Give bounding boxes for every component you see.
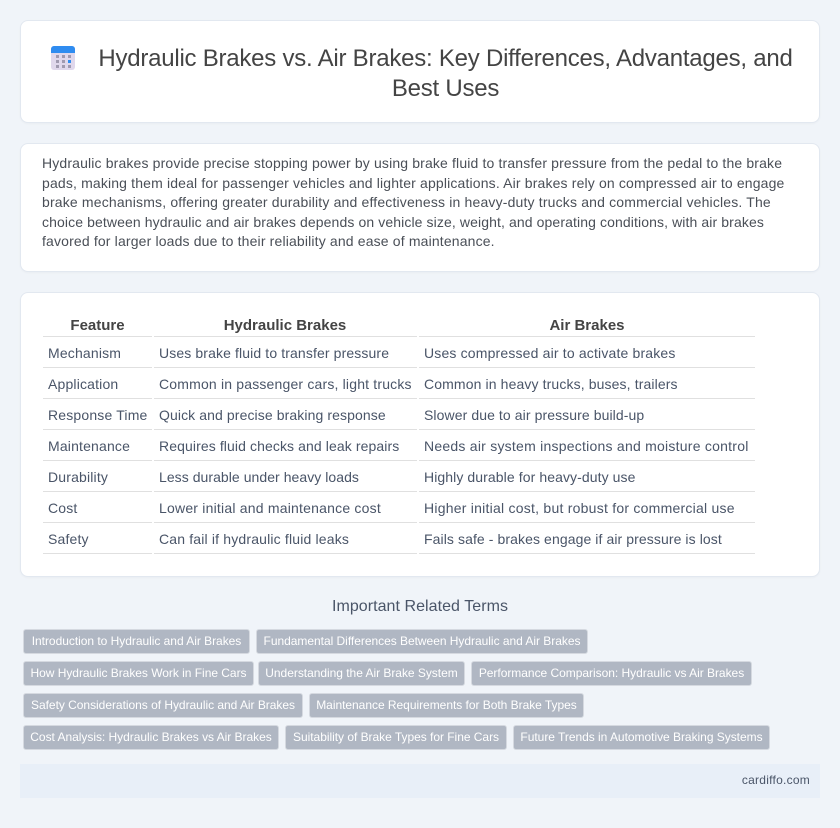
table header: Feature — [70, 317, 125, 334]
row: mechanism: Uses compressed air to activate brakes — [424, 345, 676, 361]
summary card — [20, 143, 820, 272]
tag: Performance Comparison: Hydraulic vs Air Brakes — [479, 666, 744, 680]
summary text: choice between hydraulic and air brakes depends on vehicle size, weight, and operating conditions, with air brakes — [42, 214, 764, 230]
summary text: pads, making them ideal for passenger vehicles and lighter applications. Air brakes rely on compressed air to engage — [42, 175, 784, 191]
tag: Safety Considerations of Hydraulic and Air Brakes — [31, 698, 295, 712]
summary text: favored for larger loads due to their reliability and ease of maintenance. — [42, 233, 495, 249]
tag — [258, 661, 465, 686]
summary text: brake mechanisms, offering greater durability and effectiveness in heavy-duty trucks and commercial vehicles. The — [42, 194, 771, 210]
row: safety — [48, 531, 722, 547]
row: durability: Less durable under heavy loads — [159, 469, 359, 485]
row: response time: Quick and precise braking response — [159, 407, 386, 423]
row: application — [48, 376, 678, 392]
tag: Introduction to Hydraulic and Air Brakes — [32, 634, 241, 648]
related terms tags — [23, 629, 770, 750]
row: safety: Safety — [48, 531, 89, 547]
table header — [70, 317, 625, 334]
summary text — [42, 155, 784, 249]
row: maintenance — [48, 438, 749, 454]
tag — [23, 661, 254, 686]
row: maintenance: Requires fluid checks and leak repairs — [159, 438, 399, 454]
table header: Air Brakes — [549, 317, 625, 334]
table header: Hydraulic Brakes — [224, 317, 346, 334]
related terms heading: Important Related Terms — [332, 598, 508, 615]
title — [98, 45, 793, 102]
footer bar — [20, 764, 820, 798]
title: Hydraulic Brakes vs. Air Brakes: Key Differences, Advantages, and — [98, 45, 793, 72]
summary text: Hydraulic brakes provide precise stopping power by using brake fluid to transfer pressure from the pedal to the brake — [42, 155, 782, 171]
tag — [285, 725, 507, 750]
row: cost: Higher initial cost, but robust for commercial use — [424, 500, 735, 516]
row: application: Common in passenger cars, light trucks — [159, 376, 412, 392]
row: durability — [48, 469, 636, 485]
row: cost: Lower initial and maintenance cost — [159, 500, 381, 516]
header card — [20, 20, 820, 123]
comparison table card — [20, 292, 820, 577]
comparison table — [43, 317, 755, 554]
row: response time — [48, 407, 644, 423]
row: safety: Can fail if hydraulic fluid leaks — [159, 531, 349, 547]
tag — [23, 693, 303, 718]
row: mechanism — [48, 345, 676, 361]
tag — [23, 629, 250, 654]
row: response time: Slower due to air pressure build-up — [424, 407, 644, 423]
row: durability: Durability — [48, 469, 108, 485]
row: maintenance: Maintenance — [48, 438, 130, 454]
tag: Maintenance Requirements for Both Brake Types — [316, 698, 577, 712]
tag — [513, 725, 770, 750]
row: cost — [48, 500, 735, 516]
tag: How Hydraulic Brakes Work in Fine Cars — [30, 666, 247, 680]
row: response time: Response Time — [48, 407, 147, 423]
tag: Suitability of Brake Types for Fine Cars — [293, 730, 499, 744]
row: durability: Highly durable for heavy-duty use — [424, 469, 636, 485]
row: application: Common in heavy trucks, buses, trailers — [424, 376, 678, 392]
tag — [471, 661, 752, 686]
row: safety: Fails safe - brakes engage if air pressure is lost — [424, 531, 722, 547]
tag: Fundamental Differences Between Hydraulic and Air Brakes — [264, 634, 580, 648]
title: Best Uses — [392, 75, 499, 102]
row: mechanism: Mechanism — [48, 345, 121, 361]
row: application: Application — [48, 376, 118, 392]
row: maintenance: Needs air system inspections and moisture control — [424, 438, 749, 454]
row: cost: Cost — [48, 500, 77, 516]
tag: Cost Analysis: Hydraulic Brakes vs Air Brakes — [30, 730, 272, 744]
tag — [23, 725, 279, 750]
tag — [256, 629, 588, 654]
tag: Understanding the Air Brake System — [265, 666, 458, 680]
icon: calendar — [51, 46, 75, 70]
row: mechanism: Uses brake fluid to transfer pressure — [159, 345, 389, 361]
tag — [309, 693, 584, 718]
footer source: cardiffo.com — [742, 773, 810, 787]
tag: Future Trends in Automotive Braking Systems — [520, 730, 763, 744]
